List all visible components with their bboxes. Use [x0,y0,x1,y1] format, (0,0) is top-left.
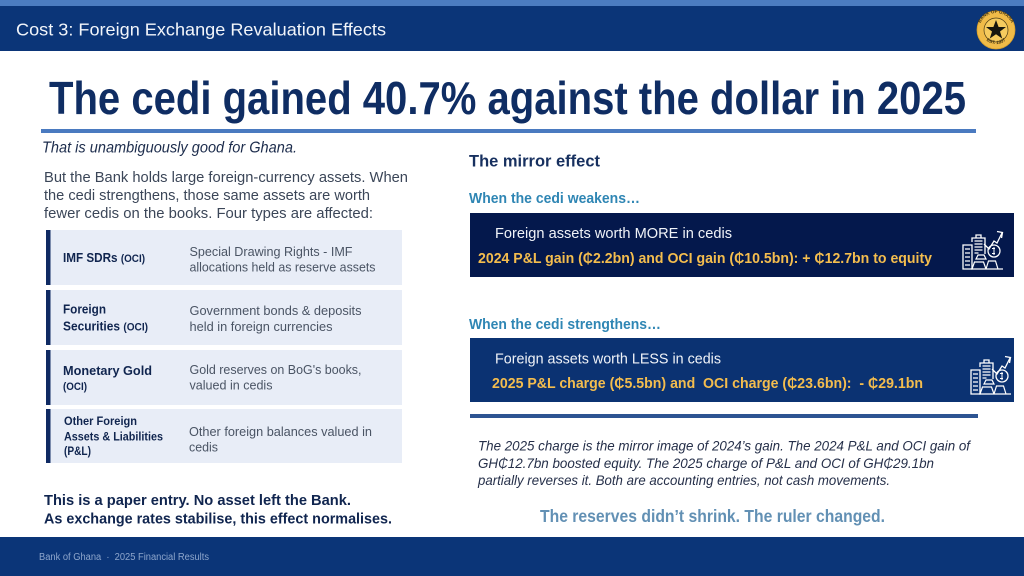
footer bar [0,537,1024,576]
card: Foreign Securities: Securities (OCI) [63,318,148,334]
explanatory text: fewer cedis on the books. Four types are affected: [44,205,373,222]
icon: Bank of Ghana seal [976,10,1016,50]
title rule [41,129,976,133]
card: Monetary Gold [46,350,402,405]
card: Other Foreign Assets & Liabilities: Other Foreign [64,416,137,428]
card: IMF SDRs: Special Drawing Rights - IMF [190,245,353,259]
card: IMF SDRs [46,230,402,285]
icon: Bank of Ghana seal: BANK OF GHANA [978,10,1014,23]
label: cedi weakens: When the cedi weakens… [469,191,640,207]
callout: strengthens: 2025 P&L charge (₵5.5bn) and OCI charge (₵23.6bn): - ₵29.1bn [492,376,923,392]
panel: mirror effect [469,152,1014,526]
closing note: This is a paper entry. No asset left the Bank. [44,492,351,509]
commentary text [477,438,972,488]
callout: strengthens: Foreign assets worth LESS in cedis [495,350,721,368]
callout: strengthens [470,338,1014,402]
card: Monetary Gold: Monetary Gold [63,363,152,378]
icon: Bank of Ghana seal: EST. 1957 [986,38,1005,44]
card: Foreign Securities: Government bonds & deposits [190,304,362,318]
card: Foreign Securities [46,290,402,345]
header bar [0,0,1024,51]
commentary text: GH₵12.7bn boosted equity. The 2025 charge of P&L and OCI of GH₵29.1bn [478,455,934,471]
card: Foreign Securities: Foreign [63,302,106,316]
header title: Cost 3: Foreign Exchange Revaluation Effects [16,20,386,40]
takeaway: The reserves didn’t shrink. The ruler changed. [540,506,885,526]
commentary text: partially reverses it. Both are accounting entries, not cash movements. [477,472,890,488]
explanatory text: the cedi strengthens, those same assets are worth [44,187,370,204]
card: Monetary Gold: Gold reserves on BoG's books, [190,363,362,377]
icon: finance growth [971,356,1011,394]
explanatory text: But the Bank holds large foreign-currency assets. When [44,169,408,186]
callout: weakens: Foreign assets worth MORE in cedis [495,225,732,242]
card: Foreign Securities: held in foreign currencies [190,320,332,334]
card: Other Foreign Assets & Liabilities [46,409,402,463]
intro statement: That is unambiguously good for Ghana. [42,140,297,156]
card: Other Foreign Assets & Liabilities: Assets & Liabilities [64,432,163,444]
closing note: As exchange rates stabilise, this effect normalises. [44,510,392,528]
closing note [44,492,392,528]
callout: weakens [470,213,1014,277]
callout: weakens: 2024 P&L gain (₵2.2bn) and OCI gain (₵10.5bn): + ₵12.7bn to equity [478,251,932,267]
footer text: Bank of Ghana · 2025 Financial Results [39,552,209,563]
divider bar [470,414,978,418]
card: IMF SDRs: IMF SDRs (OCI) [63,250,145,265]
card: IMF SDRs: allocations held as reserve assets [190,260,376,274]
card: Monetary Gold: valued in cedis [190,378,272,392]
commentary text: The 2025 charge is the mirror image of 2024’s gain. The 2024 P&L and OCI gain of [478,438,972,454]
card: Other Foreign Assets & Liabilities: (P&L) [64,446,91,458]
explanatory text [44,169,408,222]
card: Other Foreign Assets & Liabilities: Other foreign balances valued in [189,425,372,439]
card: Other Foreign Assets & Liabilities: cedis [189,440,218,454]
section heading: The mirror effect [469,152,600,170]
panel: left column [42,140,408,528]
icon: finance growth [963,232,1003,269]
card: Monetary Gold: (OCI) [63,381,87,393]
label: cedi strengthens: When the cedi strengthens… [469,317,661,333]
